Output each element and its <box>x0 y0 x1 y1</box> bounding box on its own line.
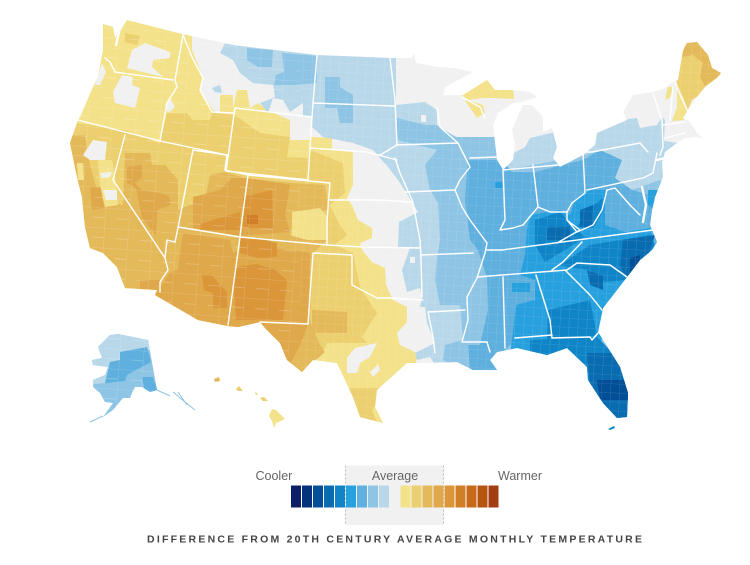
bays and sounds <box>116 28 665 222</box>
cool zone: small light blue patch, Montana <box>212 85 222 93</box>
legend colour scale <box>291 486 498 508</box>
warm zone: orange, New Mexico <box>234 238 287 320</box>
warm zone: orange-gold, desert southwest <box>155 233 310 365</box>
warm zone: orange-gold, California <box>90 187 160 290</box>
choropleth map: contiguous United States <box>70 20 721 423</box>
warm zone: Texas gold patch <box>312 310 347 333</box>
warm zone: south Texas yellow <box>348 388 378 422</box>
warm zone: upper Michigan yellow <box>462 80 514 118</box>
cool zone: medium-light blue, midwest and south <box>397 118 665 400</box>
warm zone: gold patch, Nevada north <box>135 178 161 194</box>
warm zone: slightly warmer, light yellow <box>60 10 417 440</box>
cool zone: deep blue, West Virginia <box>577 198 603 228</box>
warm zone: Maine gold <box>682 42 721 86</box>
legend labels: Average <box>372 469 418 483</box>
legend labels: Cooler <box>256 469 292 483</box>
map: Hawaii inset <box>214 377 285 428</box>
warm zone: Maine yellow <box>676 50 722 110</box>
cool zone: bright blue, Delmarva and Illinois spot <box>495 182 662 292</box>
Alaska: panhandle and Aleutians <box>90 390 195 422</box>
legend title: DIFFERENCE FROM 20TH CENTURY AVERAGE MONTHLY TEMPERATURE <box>147 534 642 546</box>
cool zone: darker blue <box>547 205 655 425</box>
warm zone: light yellow patch, eastern Colorado <box>292 208 328 240</box>
cool zone: deep blue, Georgia <box>547 300 597 342</box>
county grid east <box>300 10 730 440</box>
warm zone: yellow <box>70 113 377 372</box>
cool zone: deep blue, Kentucky <box>535 212 585 262</box>
warm zone: deep orange, Colorado <box>247 215 258 224</box>
legend labels <box>256 469 542 483</box>
cool zone: medium-light blue, northern plains <box>247 48 353 123</box>
cool zone: deep blue, Carolinas <box>560 235 655 282</box>
warm zone: gold <box>70 135 328 372</box>
cool zone: light blue <box>220 43 678 418</box>
Alaska: northern slope light blue <box>85 330 160 385</box>
cool zone: bright blue, southeast <box>510 190 660 355</box>
warm zone: orange, Arizona <box>202 275 227 308</box>
cool zone: blue, central and eastern states <box>465 150 660 375</box>
cool zone: darkest blue <box>597 255 640 400</box>
warm zone: southern Maine and New Hampshire light yellow <box>665 82 688 121</box>
legend labels: Warmer <box>498 469 542 483</box>
warm zone: orange-gold, Utah and Colorado <box>193 178 290 236</box>
warm zone: orange-gold, Nevada <box>127 165 170 235</box>
neutral holes in the west <box>83 43 380 377</box>
warm zone: orange, Colorado and Utah <box>200 190 273 230</box>
warm zone: light yellow, Sierra Nevada <box>77 160 118 207</box>
map: Alaska inset <box>85 330 195 425</box>
Alaska: interior blue <box>105 347 158 392</box>
map: Florida Keys <box>608 426 615 430</box>
cool zone: light blue, Pennsylvania and Michigan <box>616 157 622 172</box>
state borders <box>78 35 688 353</box>
warm zone: yellow patch, Puget Sound <box>125 33 140 45</box>
neutral hole in Missouri and Minnesota <box>410 115 426 263</box>
cool zone: deep blue, Florida <box>530 337 628 418</box>
county grid west <box>50 10 300 440</box>
legend band: average range <box>346 466 444 525</box>
